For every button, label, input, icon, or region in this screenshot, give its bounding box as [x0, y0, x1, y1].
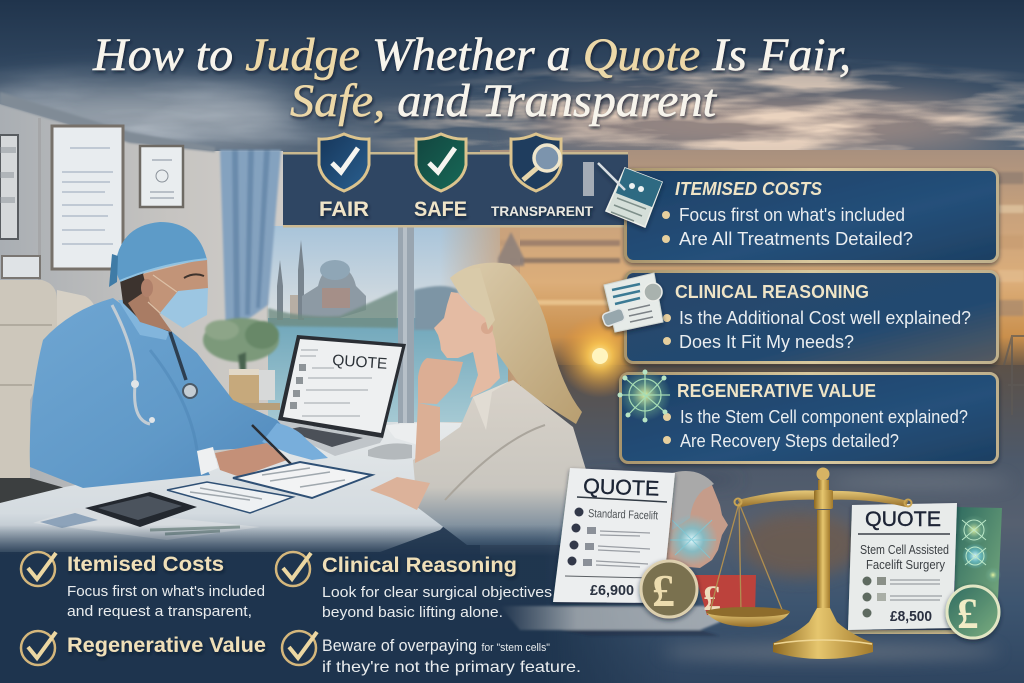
checklist: clinical reasoning: [276, 552, 552, 621]
chains: [710, 503, 783, 612]
surgeon in blue scrubs: [30, 222, 328, 488]
coin: green pound: [947, 586, 999, 638]
face and neck: [434, 292, 500, 398]
surgical mask: [160, 288, 208, 328]
window mullion: [398, 226, 414, 426]
body text: [322, 636, 581, 676]
bullet list: itemised costs: Focus first on what's included: [679, 205, 905, 225]
heading: Regenerative Value: [67, 634, 266, 657]
icon: clinical document with badge: [602, 273, 663, 332]
surgeon neck and dark hair: [120, 272, 170, 332]
patient with blonde hair: [370, 263, 587, 545]
sun on the horizon: [558, 314, 642, 398]
white cuff: [197, 447, 218, 475]
check icon: [282, 631, 317, 665]
bullet list: clinical reasoning: Does It Fit My needs?: [679, 332, 854, 352]
table: [0, 423, 500, 552]
quote heading: QUOTE: [865, 508, 941, 531]
coin: green pound: £: [957, 591, 978, 638]
panel heading: clinical reasoning: CLINICAL REASONING: [675, 282, 869, 302]
icon: document with pen: [598, 163, 662, 227]
bullet list: clinical reasoning: [663, 308, 971, 352]
coin: bronze pound: [641, 561, 697, 617]
icon: face with stem cell glow: [665, 471, 728, 568]
checklist: itemised costs: [21, 552, 265, 620]
panel: clinical reasoning: [626, 272, 998, 362]
red pound block: [695, 575, 756, 618]
balance scale: [706, 468, 912, 659]
price: £6,900: [590, 582, 634, 599]
bridge at far right: [1004, 335, 1024, 415]
laptop with quote on screen: [270, 335, 406, 456]
quote heading: QUOTE: [583, 475, 660, 501]
mosque skyline: [277, 240, 366, 320]
label: safe: SAFE: [414, 198, 467, 221]
check icon: [21, 631, 56, 665]
body text: and request a transparent,: [67, 603, 252, 620]
shield: fair: [319, 134, 369, 191]
pan: [706, 612, 790, 627]
laptop screen quote: QUOTE: [332, 352, 388, 373]
quote subtitle: Standard Facelift: [588, 508, 659, 522]
surgeon writing hand: [215, 443, 287, 477]
bottom dark overlay: [0, 525, 680, 683]
red pound block: £: [703, 578, 721, 618]
label: fair: FAIR: [319, 198, 369, 221]
surgeon face: [143, 258, 208, 314]
stethoscope: [112, 305, 197, 424]
body text: [322, 584, 552, 621]
panel heading: regenerative value: REGENERATIVE VALUE: [677, 381, 876, 401]
label: transparent: TRANSPARENT: [491, 203, 593, 219]
icon: stem cell molecule: [618, 369, 671, 422]
body text: Beware of overpaying for "stem cells": [322, 636, 550, 655]
panel: regenerative value: [620, 374, 998, 462]
coin: bronze pound: £: [652, 565, 675, 616]
base: [773, 608, 873, 659]
bullet list: regenerative value: [663, 407, 968, 451]
office chair: [0, 280, 97, 505]
desk papers and calculator: [33, 462, 372, 540]
bullet list: itemised costs: Are All Treatments Detailed?: [679, 229, 913, 249]
heading: Itemised Costs: [67, 553, 224, 576]
plant in pot: [203, 318, 280, 410]
front hair lock: [450, 268, 495, 330]
body text: if they're not the primary feature.: [322, 659, 581, 676]
calculator: [85, 492, 197, 527]
forearm: [415, 403, 440, 463]
blouse: [413, 380, 587, 545]
bullet list: itemised costs: [662, 205, 913, 249]
quote subtitle: [860, 543, 949, 572]
heading: Clinical Reasoning: [322, 554, 517, 577]
window view: Istanbul skyline and water: [268, 226, 524, 426]
card: standard facelift quote: [553, 468, 675, 603]
shield: transparent with magnifier: [511, 134, 561, 191]
card: stem cell assisted quote: [848, 503, 1002, 634]
bullet list: regenerative value: Are Recovery Steps detailed?: [680, 431, 899, 451]
platform strip under left quote: [500, 606, 720, 636]
quote subtitle: Stem Cell Assisted: [860, 543, 949, 557]
post: [817, 510, 830, 610]
checklist: regenerative value: [21, 631, 266, 665]
bullet list: clinical reasoning: Is the Additional Cost well explained?: [679, 308, 971, 328]
pen tool in band: [583, 162, 594, 196]
pen: [252, 425, 292, 465]
check icon: [276, 552, 311, 586]
surgical cap: [116, 222, 207, 281]
shield: safe: [416, 134, 466, 191]
body text: beyond basic lifting alone.: [322, 604, 503, 621]
body text: Focus first on what's included: [67, 583, 265, 600]
green backdrop with cells: [955, 507, 1002, 625]
chin-resting hand: [418, 358, 463, 404]
beam: [738, 490, 908, 507]
body text: [67, 583, 265, 620]
panel heading: itemised costs: ITEMISED COSTS: [675, 179, 822, 199]
title: [92, 29, 851, 127]
curtain: [220, 150, 281, 335]
hair behind shoulders: [450, 263, 582, 424]
fair safe transparent band: [283, 134, 628, 228]
title line 1: How to Judge Whether a Quote Is Fair,: [92, 29, 851, 81]
surgeon gown: [30, 298, 300, 488]
check icon: [21, 552, 56, 586]
hand on table: [370, 477, 430, 510]
title line 2: Safe, and Transparent: [290, 75, 717, 127]
checklist: beware of overpaying: [282, 631, 581, 676]
bullet list: regenerative value: Is the Stem Cell component explained?: [680, 407, 968, 427]
price: £8,500: [890, 608, 932, 625]
quote subtitle: Facelift Surgery: [866, 558, 946, 572]
panel: itemised costs: [626, 170, 998, 262]
framed certificates on wall: [0, 126, 183, 278]
body text: Look for clear surgical objectives: [322, 584, 552, 601]
gloved hand: [262, 423, 328, 460]
room wall with ceiling: [0, 92, 283, 510]
